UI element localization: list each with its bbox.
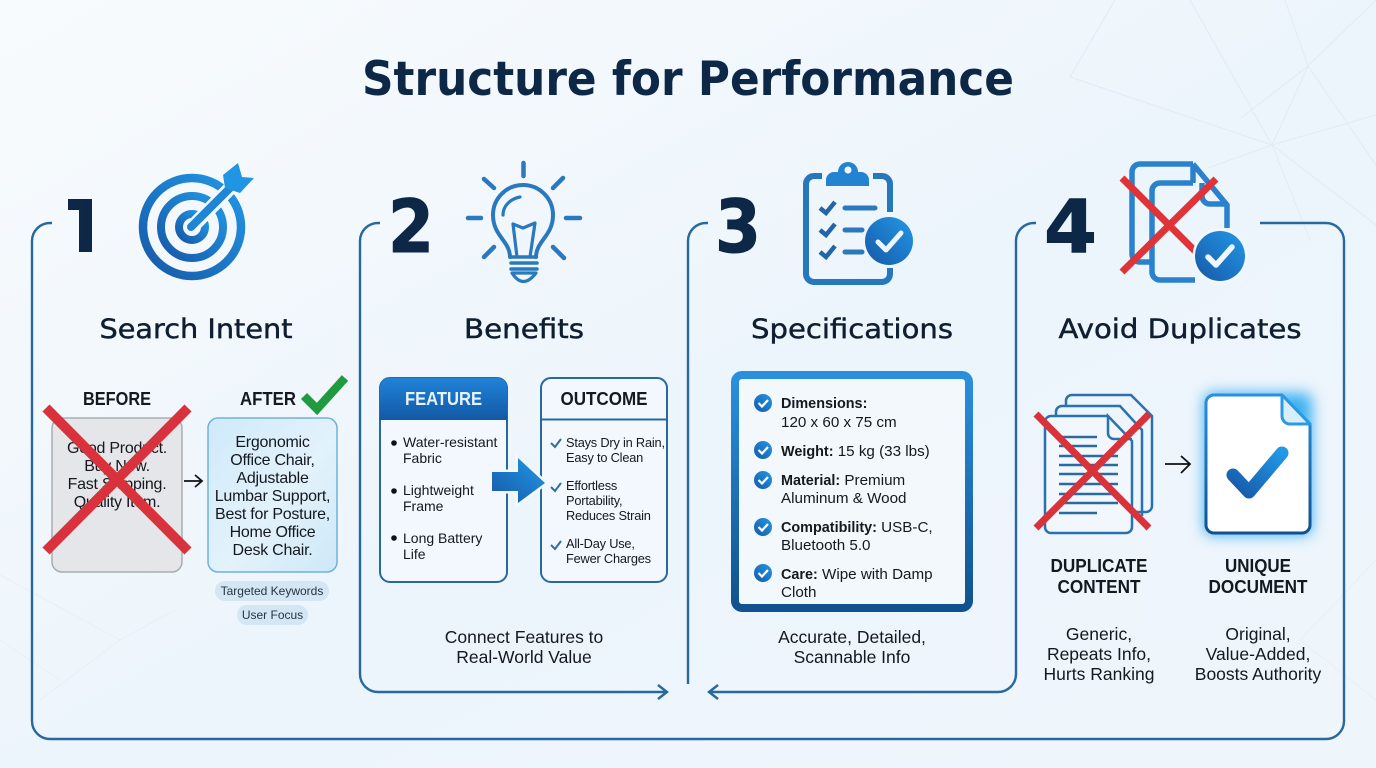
frame: specifications divider <box>688 223 708 684</box>
after card: Lumbar Support, <box>215 488 330 505</box>
after card: Ergonomic <box>235 434 310 451</box>
caption: Real-World Value <box>456 647 592 667</box>
outcome box: Stays Dry in Rain, <box>566 435 665 450</box>
arrow <box>184 475 202 487</box>
caption <box>445 627 603 667</box>
heading: Specifications <box>751 314 953 345</box>
caption: duplicate <box>1044 624 1154 684</box>
caption: unique <box>1195 624 1321 684</box>
caption: duplicate: Hurts Ranking <box>1044 664 1154 684</box>
panel: avoid duplicates <box>1036 164 1321 684</box>
spec list <box>754 394 933 601</box>
label: duplicate content <box>1050 556 1148 597</box>
after card: Desk Chair. <box>233 542 312 559</box>
heading: Avoid Duplicates <box>1058 314 1302 345</box>
heading: Benefits <box>464 314 584 345</box>
tag: user focus <box>237 605 308 625</box>
arrow: feature to outcome <box>492 458 545 503</box>
spec list: Weight: 15 kg (33 lbs) <box>781 443 930 460</box>
caption: duplicate: Repeats Info, <box>1047 644 1151 664</box>
feature box <box>380 378 507 582</box>
panel: specifications <box>715 162 969 667</box>
spec list: Bluetooth 5.0 <box>781 537 871 554</box>
after card: Office Chair, <box>230 452 315 469</box>
caption: unique: Original, <box>1225 624 1291 644</box>
label: duplicate content: CONTENT <box>1058 577 1140 597</box>
spec list: Compatibility: USB-C, <box>781 519 933 536</box>
spec list: 120 x 60 x 75 cm <box>781 414 897 431</box>
outcome box: Portability, <box>566 493 622 508</box>
caption <box>778 627 926 667</box>
spec list: Cloth <box>781 584 816 601</box>
tag: targeted keywords: Targeted Keywords <box>221 584 323 598</box>
spec card <box>735 375 969 608</box>
feature box: Lightweight <box>403 482 474 498</box>
feature box: Long Battery <box>403 530 482 546</box>
caption: unique: Boosts Authority <box>1195 664 1321 684</box>
after label: AFTER <box>240 389 296 409</box>
number 1 <box>68 199 92 252</box>
number 4: 4 <box>1044 185 1097 270</box>
label: unique document <box>1208 556 1308 597</box>
frame: outer bracket <box>32 223 1344 739</box>
feature box: Fabric <box>403 450 442 466</box>
spec list: Dimensions: <box>781 396 867 412</box>
after card: Best for Posture, <box>215 506 330 523</box>
outcome box: Fewer Charges <box>566 551 651 566</box>
label: duplicate content: DUPLICATE <box>1050 556 1148 576</box>
number 3: 3 <box>715 185 761 270</box>
after card: Adjustable <box>236 470 309 487</box>
icon: unique document <box>1204 393 1312 535</box>
after card <box>208 418 337 572</box>
panel: search intent <box>46 163 345 625</box>
before card: Fast Shipping. <box>68 476 166 493</box>
tag: targeted keywords <box>215 581 329 601</box>
outcome box: Easy to Clean <box>566 450 643 465</box>
outcome box <box>541 378 667 582</box>
feature box: Frame <box>403 498 444 514</box>
label: unique document: UNIQUE <box>1225 556 1291 576</box>
icon: target with arrow <box>143 163 254 276</box>
red cross <box>46 408 188 551</box>
spec list: Aluminum & Wood <box>781 490 906 507</box>
label: unique document: DOCUMENT <box>1208 577 1308 597</box>
frame: benefits bracket with arrow <box>360 223 667 699</box>
feature box: FEATURE <box>405 389 482 409</box>
icon: crossed documents with check <box>1122 164 1248 284</box>
number 2: 2 <box>388 185 434 270</box>
icon: duplicate documents <box>1045 395 1152 533</box>
outcome box: Effortless <box>566 478 617 493</box>
caption: Connect Features to <box>445 627 603 647</box>
frame: avoid duplicates bracket with arrow <box>709 223 1036 699</box>
spec list: Care: Wipe with Damp <box>781 566 933 583</box>
spec list: Material: Premium <box>781 472 905 489</box>
caption: Accurate, Detailed, <box>778 627 926 647</box>
icon: clipboard with check <box>806 162 913 282</box>
feature box: Life <box>403 546 426 562</box>
caption: duplicate: Generic, <box>1066 624 1132 644</box>
icon: green check <box>304 378 345 409</box>
caption: Scannable Info <box>794 647 910 667</box>
caption: unique: Value-Added, <box>1206 644 1310 664</box>
title: Structure for Performance <box>362 52 1014 107</box>
outcome box: OUTCOME <box>560 389 648 409</box>
panel: benefits <box>380 163 667 667</box>
before card: Quality Item. <box>74 494 160 511</box>
before label: BEFORE <box>83 389 151 409</box>
outcome box: Reduces Strain <box>566 508 651 523</box>
heading: Search Intent <box>100 314 292 345</box>
before card: Buy Now. <box>84 458 150 475</box>
feature box: Water-resistant <box>403 434 498 450</box>
red cross <box>1036 414 1149 528</box>
before card <box>52 418 182 572</box>
icon: light bulb <box>468 163 580 282</box>
after card: Home Office <box>230 524 316 541</box>
outcome box: All-Day Use, <box>566 536 635 551</box>
number 1: 1 <box>62 185 100 270</box>
tag: user focus: User Focus <box>242 608 303 622</box>
before card: Good Product. <box>67 440 167 457</box>
arrow <box>1165 456 1190 473</box>
